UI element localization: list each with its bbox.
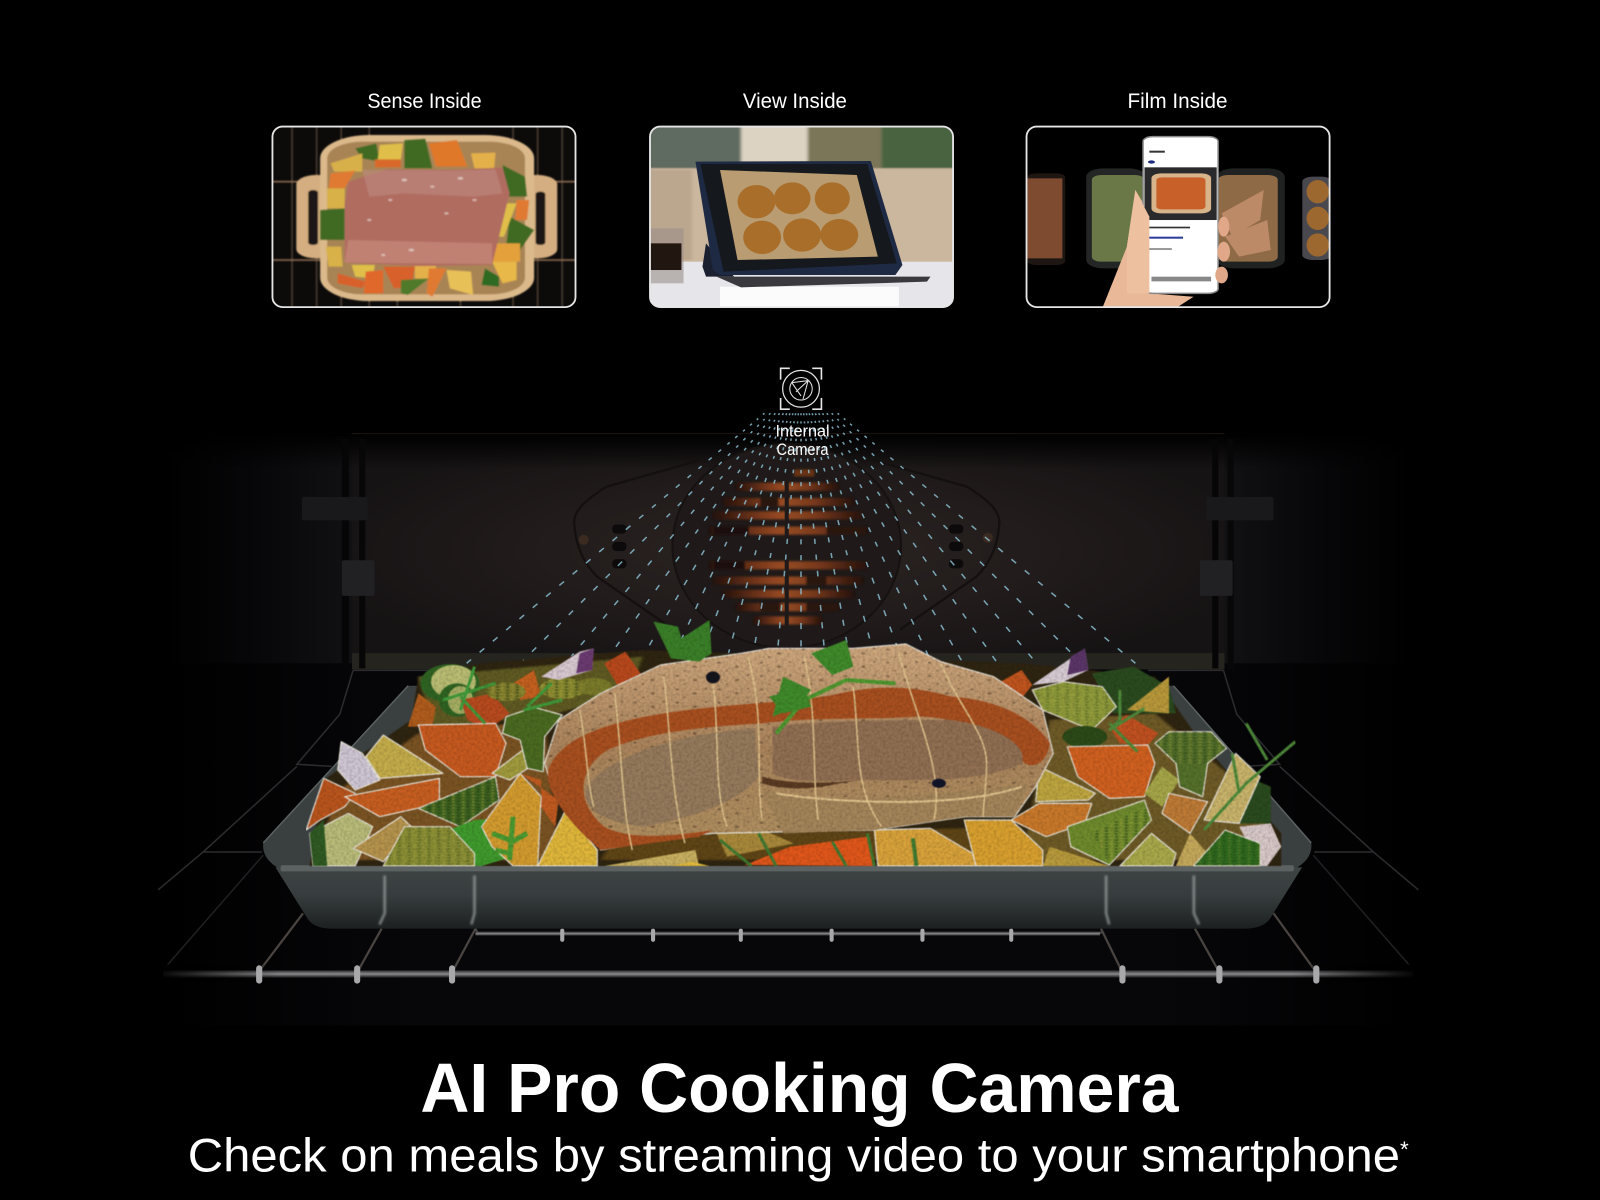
tablet with keyboard <box>717 277 930 287</box>
vegetables in dish <box>355 143 380 162</box>
blurred colour underlay <box>320 657 1267 860</box>
coffee glass <box>650 228 684 283</box>
oven rack <box>153 670 1418 984</box>
hand behind phone <box>1102 190 1194 308</box>
subtitle: * <box>1400 1137 1409 1162</box>
butcher's string <box>580 653 1022 850</box>
label: View Inside: View Inside <box>743 89 847 113</box>
bacon band <box>548 688 1050 850</box>
raw roast <box>345 168 510 266</box>
baking pan <box>263 686 1311 929</box>
roast meat <box>545 640 1053 850</box>
icon: internal camera <box>781 368 821 409</box>
oven interior <box>163 434 1413 1026</box>
label: Sense Inside: Sense Inside <box>367 89 482 113</box>
label: internal camera <box>776 422 830 459</box>
parchment <box>720 170 878 260</box>
panel: Film Inside photo <box>1027 127 1332 308</box>
blurred background <box>643 123 962 262</box>
panel: View Inside photo <box>643 123 962 308</box>
panel: Sense Inside photo <box>271 127 576 308</box>
right vegetables <box>443 648 1295 866</box>
subtitle: Check on meals by streaming video to your smartphone <box>188 1129 1400 1181</box>
oven fan heater <box>574 444 999 648</box>
food base layer <box>310 650 1281 866</box>
fingers <box>1218 217 1229 237</box>
camera scanning rays <box>467 413 1135 663</box>
back left vegetables <box>408 648 643 730</box>
label: internal camera: Camera <box>777 440 829 459</box>
title: AI Pro Cooking Camera <box>420 1049 1180 1127</box>
herb sprig behind roast <box>653 620 712 662</box>
food on the pan <box>306 620 1295 866</box>
inner meat <box>586 728 759 827</box>
label: Film Inside: Film Inside <box>1128 89 1228 113</box>
label: internal camera: Internal <box>776 422 830 441</box>
smartphone <box>1143 137 1218 293</box>
left vegetables <box>306 707 597 866</box>
herb on roast <box>769 640 895 733</box>
side dish trays <box>1027 168 1332 268</box>
counter <box>650 262 955 308</box>
baking dish <box>296 175 557 258</box>
cookies <box>738 185 775 218</box>
centre and right-bottom vegetables <box>604 820 1043 866</box>
